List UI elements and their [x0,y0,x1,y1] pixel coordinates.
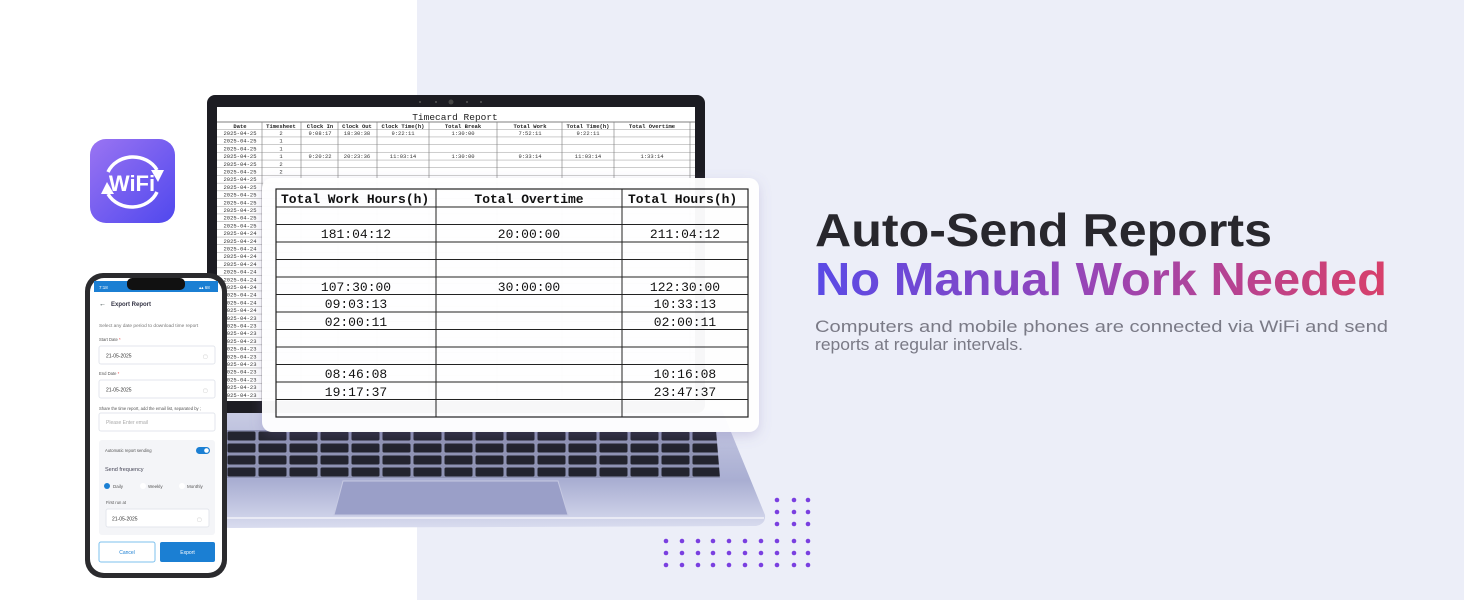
phone: export report screen: End Date * [99,371,120,376]
spreadsheet: timecard report: Total Time(h) [567,123,609,130]
popup card: totals table: 02:00:11 [325,315,387,330]
spreadsheet: timecard report: 2025-04-23 [223,338,257,345]
spreadsheet: timecard report: 1 [279,153,283,160]
phone: export report screen: ← [99,301,106,308]
spreadsheet: timecard report: 2025-04-24 [223,292,257,299]
spreadsheet: timecard report: 2025-04-24 [223,269,257,276]
spreadsheet: timecard report: 1:30:00 [451,153,475,160]
spreadsheet: timecard report: 2025-04-24 [223,230,257,237]
spreadsheet: timecard report: 9:22:11 [576,130,600,137]
spreadsheet: timecard report: 11:03:14 [390,153,417,160]
popup card: totals table: 09:03:13 [325,297,387,312]
spreadsheet: timecard report: 9:20:22 [308,153,332,160]
spreadsheet: timecard report: 2025-04-24 [223,253,257,260]
phone: export report screen: 21-05-2025 [106,388,132,394]
popup card: totals table: 10:16:08 [654,367,716,382]
spreadsheet: timecard report: 2025-04-25 [223,199,257,206]
spreadsheet: timecard report: 2025-04-25 [223,153,257,160]
spreadsheet: timecard report: 2025-04-23 [223,369,257,376]
spreadsheet: timecard report: 2025-04-23 [223,322,257,330]
spreadsheet: timecard report: 2025-04-25 [223,207,257,214]
laptop base [212,410,765,528]
spreadsheet: timecard report: 2025-04-23 [223,346,257,353]
spreadsheet: timecard report: 2025-04-25 [223,161,257,168]
spreadsheet: timecard report: 2025-04-25 [223,222,257,229]
spreadsheet: timecard report: 2025-04-23 [223,353,257,360]
spreadsheet: timecard report: 2025-04-25 [223,168,257,176]
spreadsheet: timecard report: 2025-04-24 [223,238,257,245]
phone: export report screen: Send frequency [105,467,144,473]
spreadsheet: timecard report: 9:22:11 [391,130,415,137]
spreadsheet: timecard report: 2025-04-25 [223,184,257,191]
popup card: totals table: 122:30:00 [650,280,720,295]
popup card: totals table: 181:04:12 [321,227,391,242]
spreadsheet: timecard report: 2025-04-23 [223,384,257,391]
spreadsheet: timecard report: 2025-04-23 [223,376,257,383]
headline: No Manual Work Needed [815,253,1387,305]
phone: export report screen: Share the time report, add the email list, separated by ; [99,406,201,411]
spreadsheet: timecard report: 2025-04-25 [223,192,257,199]
spreadsheet: timecard report: Timesheet [266,123,296,130]
phone: export report screen: Please Enter email [106,420,148,426]
phone: export report screen: 21-05-2025 [106,354,132,360]
phone: export report screen: First run at [106,500,127,505]
phone: export report screen: ▢ [203,388,208,394]
spreadsheet: timecard report: 2025-04-25 [223,130,257,137]
spreadsheet: timecard report: 2025-04-25 [223,145,257,152]
spreadsheet: timecard report: 2 [279,130,283,137]
spreadsheet: timecard report: Date [233,123,247,130]
spreadsheet: timecard report: 2025-04-23 [223,361,257,368]
popup card: totals table: 211:04:12 [650,227,720,242]
phone: export report screen: Start Date * [99,337,121,342]
popup card: totals table: 10:33:13 [654,297,716,312]
spreadsheet: timecard report: 7:52:11 [518,130,542,137]
popup card: totals table: 23:47:37 [654,385,716,400]
popup card: totals table: 20:00:00 [498,227,560,242]
popup card: totals table: Total Overtime [474,192,584,207]
spreadsheet: timecard report: 2025-04-25 [223,215,257,222]
description text [815,317,1388,354]
spreadsheet: timecard report [217,112,695,401]
spreadsheet: timecard report: 2025-04-23 [223,392,257,399]
spreadsheet: timecard report: 1 [279,138,283,145]
background right panel [417,0,1464,600]
spreadsheet: timecard report: 2025-04-24 [223,246,257,252]
popup card: totals table: Total Hours(h) [628,192,737,207]
spreadsheet: timecard report: 2 [279,161,283,168]
popup card: totals table: 02:00:11 [654,315,716,330]
spreadsheet: timecard report: 1:33:14 [640,153,664,160]
phone: export report screen: Automatic report sending [105,448,152,453]
spreadsheet: timecard report: 9:33:14 [518,153,542,160]
popup card: totals table: 30:00:00 [498,280,560,295]
phone: export report screen: Export [180,550,195,556]
spreadsheet: timecard report: Timecard Report [412,112,498,123]
phone: export report screen: ▢ [203,354,208,360]
popup card: totals table [262,178,759,432]
spreadsheet: timecard report: 2025-04-24 [223,299,257,306]
phone: export report screen: 7:18 [99,285,108,290]
popup card: totals table: 19:17:37 [325,385,387,400]
spreadsheet: timecard report: Clock Out [342,123,372,130]
headline: Auto-Send Reports [815,204,1272,256]
spreadsheet: timecard report: 2025-04-24 [223,284,257,291]
spreadsheet: timecard report: 2025-04-23 [223,315,257,322]
description text: reports at regular intervals. [815,335,1023,354]
spreadsheet: timecard report: 2025-04-24 [223,261,257,268]
spreadsheet: timecard report: 1:30:00 [451,130,475,137]
icon: wifi app [90,139,175,223]
spreadsheet: timecard report: 18:30:38 [344,130,370,137]
icon: wifi app: WiFi [109,171,155,196]
spreadsheet: timecard report: Total Break [445,123,482,130]
phone: export report screen [85,273,227,578]
phone: export report screen: ▢ [197,517,202,523]
spreadsheet: timecard report: 2025-04-23 [223,330,257,337]
spreadsheet: timecard report: 2025-04-25 [223,176,257,183]
phone: export report screen: Daily [113,484,124,489]
spreadsheet: timecard report: 2025-04-25 [223,138,257,145]
spreadsheet: timecard report: 2025-04-24 [223,307,257,314]
laptop [207,95,765,528]
phone: export report screen: Export Report [111,302,151,308]
popup card: totals table: 08:46:08 [325,367,387,382]
headline [815,204,1387,305]
phone: export report screen: ▴▴ 68 [199,285,210,290]
spreadsheet: timecard report: 20:23:36 [344,153,370,160]
spreadsheet: timecard report: 11:03:14 [575,153,602,160]
description text: Computers and mobile phones are connected via WiFi and send [815,317,1388,336]
spreadsheet: timecard report: 9:08:17 [308,130,332,137]
decorative dot grid [664,498,810,567]
laptop screen [207,95,705,413]
phone: export report screen: Monthly [187,484,204,489]
spreadsheet: timecard report: 2025-04-24 [223,276,257,283]
phone: export report screen: Select any date period to download time report [99,323,199,329]
spreadsheet: timecard report: Total Work [513,123,547,130]
spreadsheet: timecard report: 1 [279,145,283,152]
spreadsheet: timecard report: Clock In [307,123,333,130]
phone: export report screen: 21-05-2025 [112,516,138,522]
spreadsheet: timecard report: Total Overtime [629,123,676,130]
popup card: totals table: Total Work Hours(h) [281,192,429,207]
popup card: totals table: 107:30:00 [321,280,391,295]
spreadsheet: timecard report: Clock Time(h) [382,123,424,130]
phone: export report screen: Cancel [119,550,135,556]
spreadsheet: timecard report: 2 [279,168,283,176]
phone: export report screen: Weekly [148,484,163,489]
